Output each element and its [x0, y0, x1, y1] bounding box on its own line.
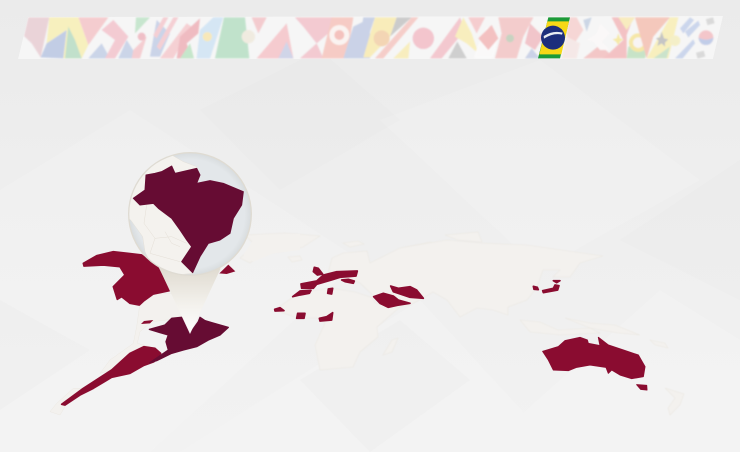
Atlantic Canada [219, 265, 235, 274]
lens: Brazil [133, 166, 243, 273]
Arctic islands [343, 241, 364, 247]
South Korea [533, 286, 538, 290]
Senegal [275, 308, 284, 311]
Madagascar [383, 338, 398, 355]
France, Belgium, Netherlands and Germany [301, 271, 357, 288]
Africa [275, 288, 400, 370]
Switzerland and Croatia [342, 279, 354, 283]
Argentina and Chile [62, 347, 161, 405]
Tunisia [328, 288, 333, 294]
map: neutral land [240, 232, 684, 415]
Ghana [297, 313, 305, 318]
right flags [360, 17, 715, 59]
pin cone [159, 268, 221, 334]
Greenland [240, 233, 320, 263]
Brazil on map [149, 317, 228, 363]
United Kingdom [313, 267, 323, 275]
New Zealand [665, 388, 684, 415]
map: highlighted Europe, Middle East, Africa and Japan [275, 267, 560, 321]
left flags [24, 17, 370, 58]
lens: borders [144, 205, 187, 262]
map: Central America and South America land [50, 293, 183, 415]
Saudi Arabia [374, 293, 410, 307]
Spain and Portugal [293, 290, 311, 297]
flag strip [18, 16, 723, 59]
Uruguay [152, 355, 161, 363]
Eurasia [327, 240, 603, 317]
Japan [543, 285, 559, 293]
pale flags [24, 17, 715, 59]
Australia [543, 337, 647, 390]
Iceland [288, 256, 302, 262]
Greenland edge near Canada [243, 234, 300, 262]
lens: neighbouring land [130, 156, 198, 274]
world map [50, 152, 684, 415]
icon: Brazil flag [538, 17, 570, 58]
USA, Canada and Mexico [83, 252, 169, 305]
Tasmania [637, 385, 647, 390]
Southeast Asia and Indonesia [520, 320, 600, 335]
magnifier [123, 152, 252, 277]
Cameroon [319, 313, 333, 321]
Iran [391, 286, 423, 298]
